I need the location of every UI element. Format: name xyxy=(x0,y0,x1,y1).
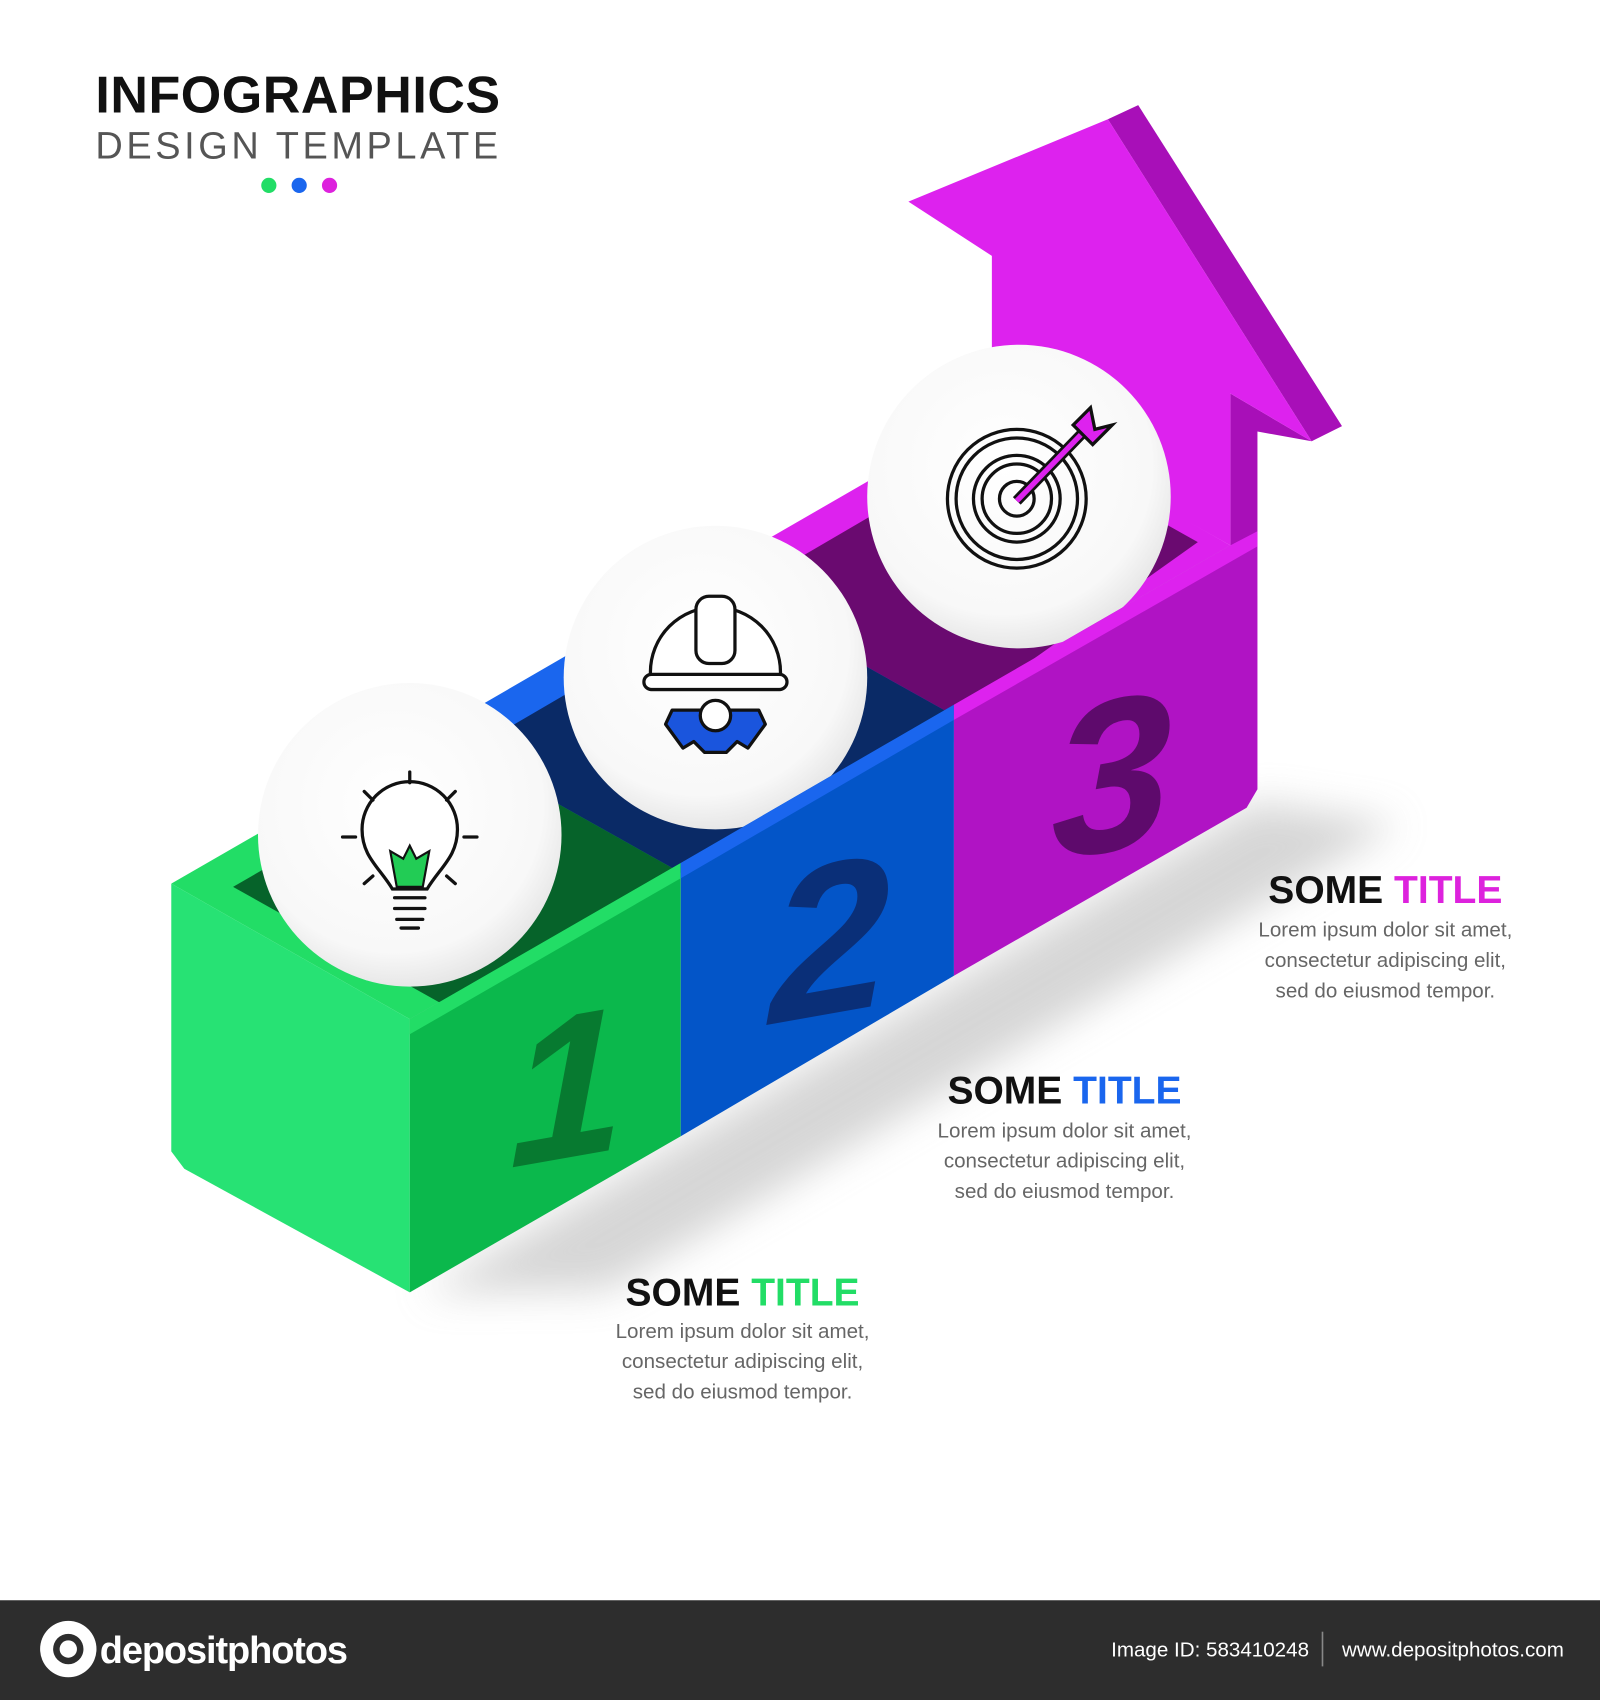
text block 1: consectetur adipiscing elit, xyxy=(622,1350,863,1373)
text block 1: sed do eiusmod tempor. xyxy=(633,1381,852,1404)
text block 3: Lorem ipsum dolor sit amet, xyxy=(1258,919,1512,942)
footer bar: www.depositphotos.com xyxy=(1341,1639,1564,1662)
number 2: 2 xyxy=(766,808,890,1072)
text block 1 xyxy=(616,1271,869,1404)
text block 3: SOME TITLE xyxy=(1268,869,1502,912)
footer bar: Image ID: 583410248 xyxy=(1111,1639,1309,1662)
trough top rims and inner xyxy=(171,410,1230,1019)
text block 3 xyxy=(1258,869,1512,1002)
title: DESIGN TEMPLATE xyxy=(95,125,502,167)
shadow xyxy=(423,802,1398,1292)
arrow xyxy=(908,105,1342,545)
text block 2: sed do eiusmod tempor. xyxy=(955,1180,1174,1203)
text block 3: sed do eiusmod tempor. xyxy=(1276,979,1495,1002)
ball 1 with lightbulb icon xyxy=(258,683,562,987)
footer bar xyxy=(0,1600,1600,1700)
text block 2: Lorem ipsum dolor sit amet, xyxy=(938,1119,1191,1142)
title xyxy=(95,67,502,167)
text block 1: SOME TITLE xyxy=(626,1271,860,1314)
color dots xyxy=(261,178,337,193)
text block 3: consectetur adipiscing elit, xyxy=(1265,949,1506,972)
front faces of boxes xyxy=(171,531,1257,1292)
text block 1: Lorem ipsum dolor sit amet, xyxy=(616,1320,869,1343)
number 1: 1 xyxy=(509,961,624,1211)
ball 3 with target icon xyxy=(867,345,1171,648)
title: INFOGRAPHICS xyxy=(95,67,501,125)
footer bar: depositphotos xyxy=(100,1630,347,1672)
ball 2 with helmet icon xyxy=(564,526,867,829)
number 3: 3 xyxy=(1051,644,1172,907)
text block 2 xyxy=(938,1070,1191,1203)
text block 2: SOME TITLE xyxy=(947,1070,1182,1113)
text block 2: consectetur adipiscing elit, xyxy=(944,1150,1185,1173)
